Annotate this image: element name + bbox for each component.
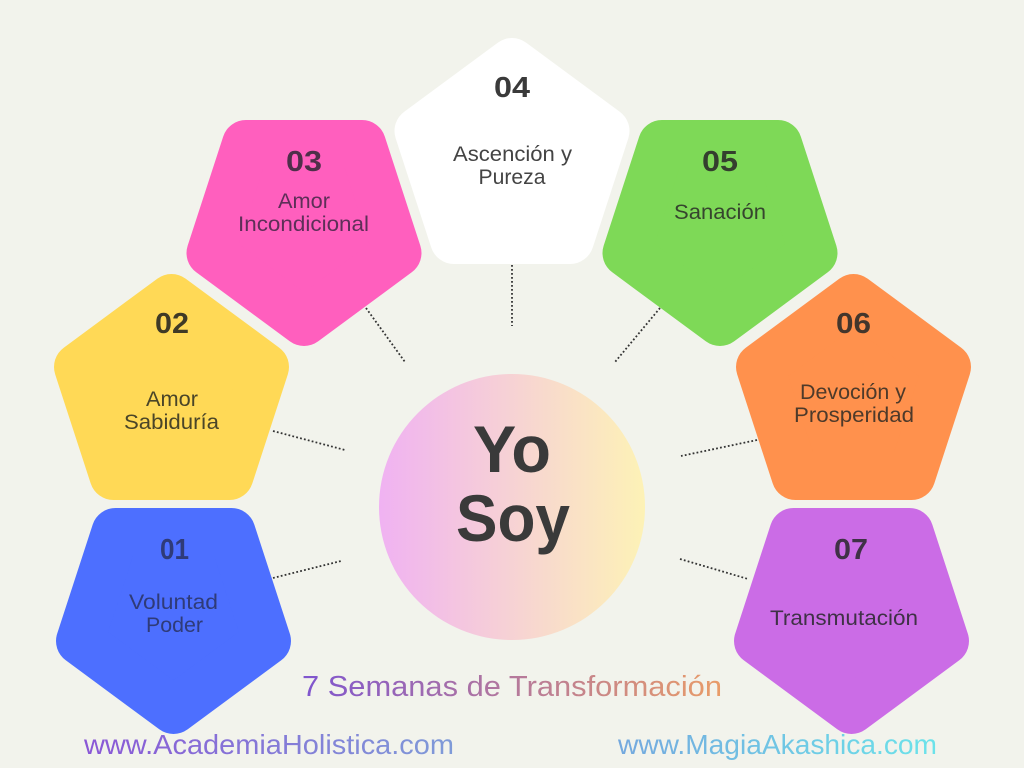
label: [124, 388, 219, 434]
label: [794, 381, 914, 427]
number 05: 05: [702, 146, 738, 178]
label: Devoción y: [800, 381, 907, 404]
panel: 06 Devoción y Prosperidad: [760, 298, 947, 476]
label: [129, 591, 218, 637]
link: Academia Holistica: www.AcademiaHolistica.com: [83, 729, 454, 760]
panel: 02 Amor Sabiduría: [78, 298, 265, 476]
connector: 02 to center: [273, 431, 345, 450]
center title: [456, 412, 570, 555]
panel: 04 Ascención y Pureza: [418, 62, 606, 240]
label: Incondicional: [238, 213, 369, 236]
label: Prosperidad: [794, 404, 914, 427]
label: Amor: [146, 388, 198, 411]
label: [238, 190, 369, 236]
number 01: 01: [160, 534, 189, 566]
center title: Soy: [456, 481, 570, 555]
label: Voluntad: [129, 591, 218, 614]
blue pentagon: [80, 532, 267, 710]
label: Ascención y: [453, 143, 573, 166]
green pentagon: [626, 144, 814, 322]
connector: 06 to center: [681, 440, 757, 456]
connector: 04 to center: [511, 265, 513, 326]
label: Pureza: [478, 166, 546, 189]
link: Magia Akashica: www.MagiaAkashica.com: [617, 729, 937, 760]
panel: 01 Voluntad Poder: [80, 532, 267, 710]
label: Sabiduría: [124, 411, 219, 434]
connector: 03 to center: [366, 308, 405, 362]
number 07: 07: [834, 534, 868, 566]
label: Transmutación: [770, 607, 918, 630]
panel: 03 Amor Incondicional: [210, 144, 398, 322]
number 03: 03: [286, 146, 322, 178]
gradient circle: [379, 374, 645, 640]
label: Sanación: [674, 201, 766, 224]
number 02: 02: [155, 308, 189, 340]
label: Poder: [146, 614, 203, 637]
panel: 07 Transmutación: [758, 532, 945, 710]
purple pentagon: [758, 532, 945, 710]
subtitle: 7 Semanas de Transformación: [302, 671, 722, 703]
yellow pentagon: [78, 298, 265, 476]
number 06: 06: [836, 308, 871, 340]
connector: 07 to center: [680, 559, 748, 579]
number 04: 04: [494, 72, 530, 104]
label: Amor: [278, 190, 330, 213]
white pentagon: [418, 62, 606, 240]
pink pentagon: [210, 144, 398, 322]
connector: 05 to center: [615, 308, 660, 362]
label: [453, 143, 573, 189]
connector: 01 to center: [273, 561, 341, 578]
panel: 05 Sanación: [626, 144, 814, 322]
center title: Yo: [473, 412, 551, 486]
orange pentagon: [760, 298, 947, 476]
center circle: Yo Soy: [379, 374, 645, 640]
